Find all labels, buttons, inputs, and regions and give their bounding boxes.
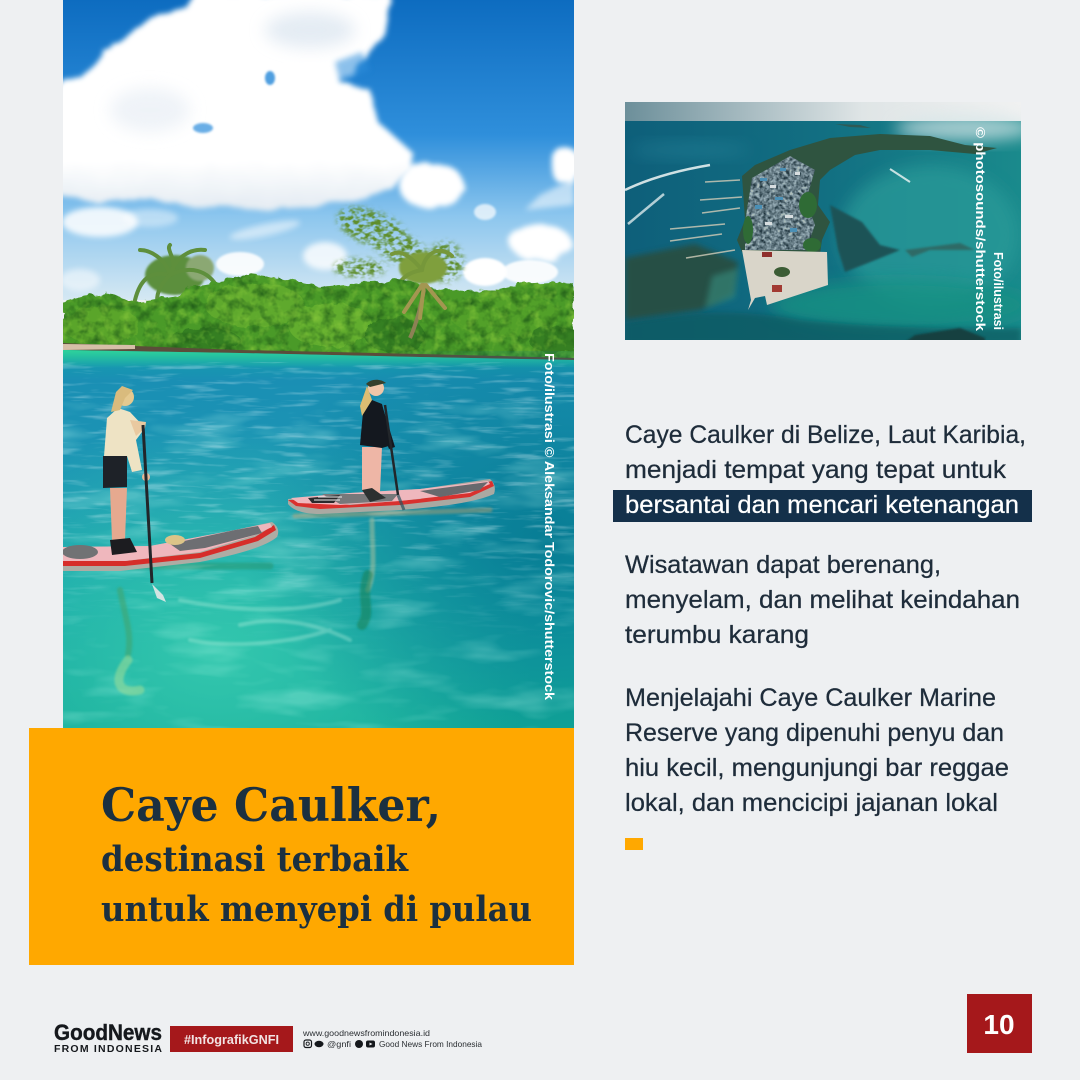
reefs — [625, 244, 738, 320]
paddle back — [385, 405, 398, 495]
text block: marine reserve — [625, 684, 1009, 817]
palm trees — [133, 242, 454, 302]
title: Caye Caulker, — [101, 778, 441, 832]
title panel — [29, 728, 574, 965]
hashtag label — [170, 1026, 293, 1052]
sea — [625, 121, 1021, 340]
text block: activities — [625, 551, 1020, 649]
beach — [742, 250, 828, 310]
hashtag label: #InfografikGNFI — [184, 1033, 279, 1047]
website and social handles: Good News From Indonesia — [379, 1039, 482, 1049]
paddleboard back — [288, 479, 495, 514]
person front — [103, 386, 150, 555]
person back — [360, 380, 395, 502]
piers — [670, 180, 742, 258]
website and social handles: www.goodnewsfromindonesia.id — [302, 1028, 430, 1038]
text block: intro: menjadi tempat yang tepat untuk — [625, 456, 1007, 484]
text block: marine reserve: lokal, dan mencicipi jajanan lokal — [625, 789, 998, 817]
page number badge: 10 — [983, 1009, 1015, 1040]
paddle front — [143, 425, 152, 583]
shoreline — [63, 343, 574, 360]
text block: intro: bersantai dan mencari ketenangan — [625, 491, 1019, 519]
photo credit: main photo: Foto/ilustrasi © Aleksandar Todorovic/shutterstock — [542, 353, 556, 700]
text block: marine reserve: hiu kecil, mengunjungi bar reggae — [625, 754, 1009, 782]
text block: marine reserve: Reserve yang dipenuhi penyu dan — [625, 719, 1004, 747]
text block: intro: Caye Caulker di Belize, Laut Karibia, — [625, 421, 1026, 449]
main photo: paddleboarders in the lagoon — [55, 0, 581, 728]
text block: activities: menyelam, dan melihat keindahan — [625, 586, 1020, 614]
subtitle line 2: untuk menyepi di pulau — [101, 889, 532, 930]
end mark — [625, 838, 643, 850]
reflections — [65, 510, 490, 691]
page number badge — [967, 994, 1032, 1053]
aerial photo of the island — [625, 102, 1035, 345]
text block: activities: Wisatawan dapat berenang, — [625, 551, 941, 579]
website and social handles — [302, 1028, 482, 1049]
mangrove foliage — [60, 274, 581, 362]
sky — [63, 0, 574, 300]
photo credit: aerial photo: © photosounds/shutterstock — [973, 127, 987, 331]
icon: instagram — [304, 1040, 312, 1048]
logo: GoodNews From Indonesia — [54, 1020, 162, 1055]
casuarina tree — [332, 200, 463, 282]
icon: youtube — [366, 1040, 375, 1048]
palm trunk over foliage — [410, 290, 424, 338]
text block: marine reserve: Menjelajahi Caye Caulker Marine — [625, 684, 996, 712]
clouds — [55, 0, 581, 291]
highlight bar — [613, 490, 1032, 522]
water — [63, 350, 574, 728]
subtitle line 1: destinasi terbaik — [101, 839, 409, 880]
photo credit: aerial photo: Foto/ilustrasi — [991, 252, 1005, 330]
paddleboard front — [60, 522, 278, 571]
horizon sky — [625, 102, 928, 121]
icon: facebook — [355, 1040, 363, 1048]
website and social handles: @gnfi — [327, 1039, 351, 1049]
island — [737, 134, 997, 310]
text block: intro — [613, 421, 1032, 522]
photo credit: aerial photo — [973, 127, 1005, 331]
text block: activities: terumbu karang — [625, 621, 809, 649]
logo: GoodNews From Indonesia: GoodNews — [54, 1020, 162, 1045]
distant islet — [835, 124, 871, 128]
logo: GoodNews From Indonesia: FROM INDONESIA — [54, 1043, 162, 1055]
boat wakes — [625, 165, 710, 190]
icon: twitter — [314, 1041, 324, 1047]
